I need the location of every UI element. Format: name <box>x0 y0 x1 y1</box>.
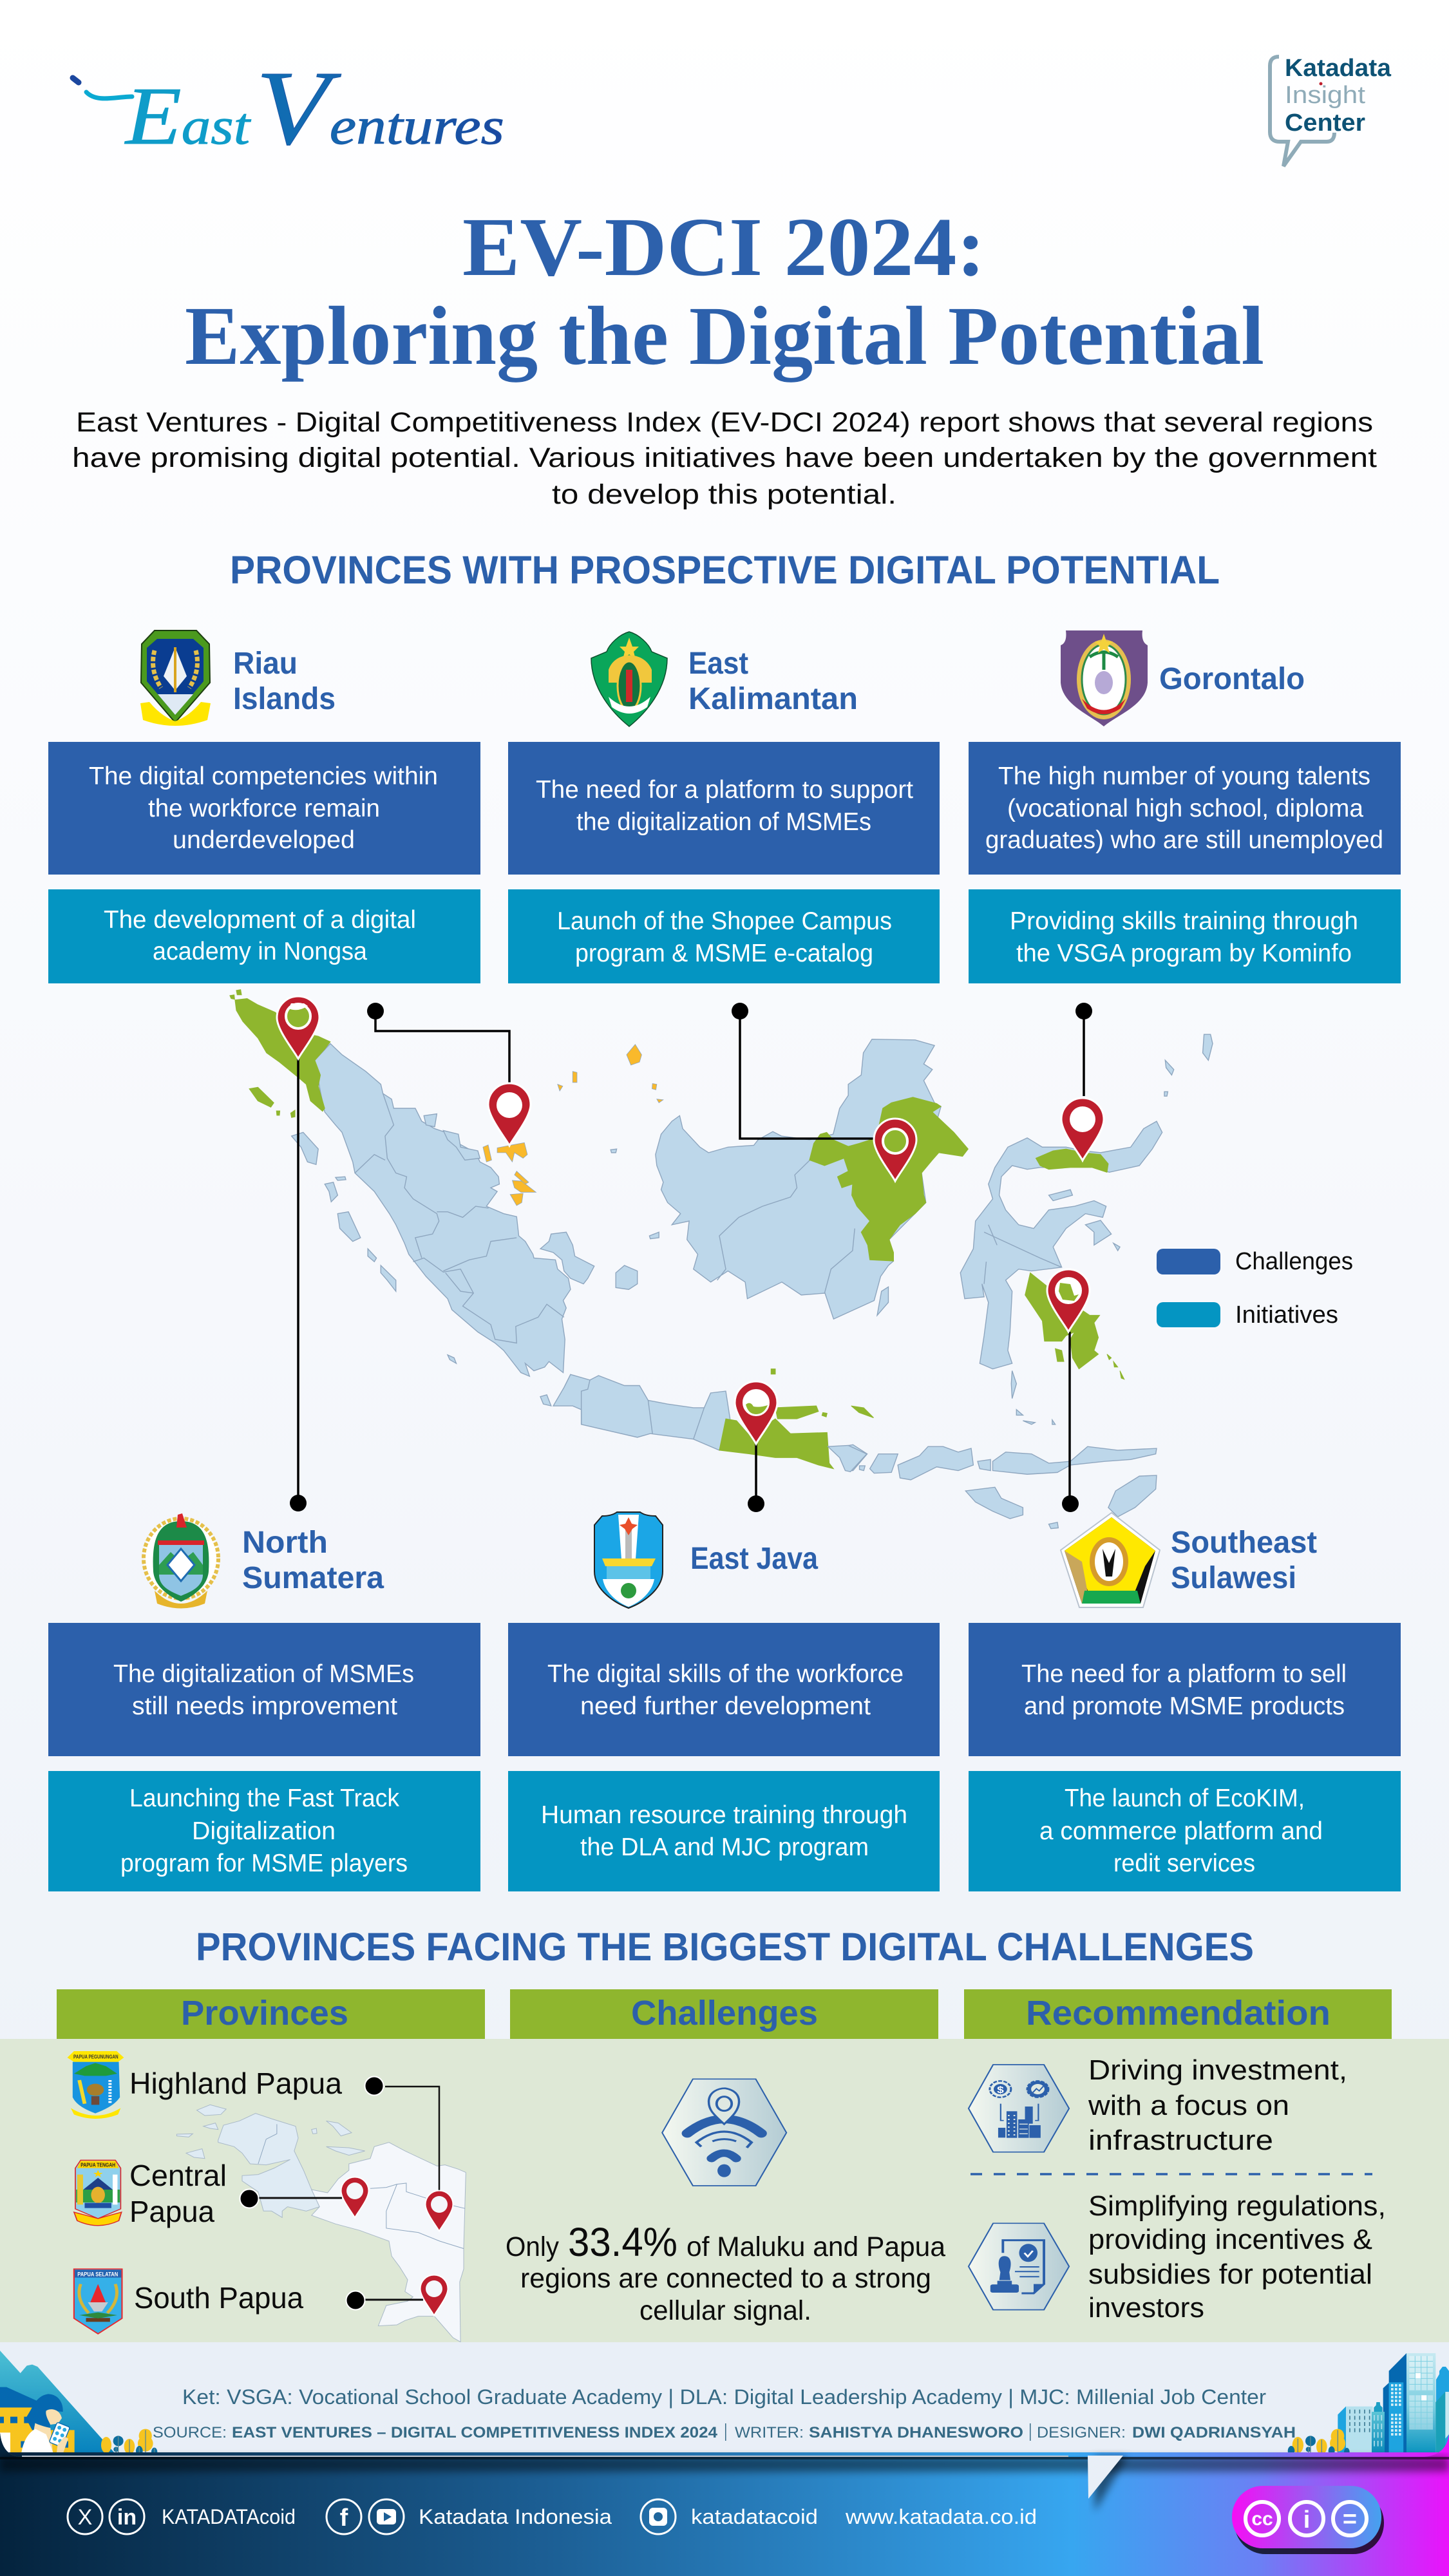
initiative card: East Kalimantan <box>508 889 940 983</box>
logo: East Ventures: East <box>124 70 251 162</box>
label <box>233 647 336 716</box>
province: East Kalimantan <box>591 632 858 726</box>
challenge card: Gorontalo: graduates) who are still unemployed <box>985 826 1383 854</box>
icon: regulation document and stamp <box>969 2223 1069 2310</box>
challenge card: Gorontalo <box>969 742 1401 875</box>
logo: Katadata Insight Center: Insight <box>1285 82 1365 109</box>
connector: Southeast Sulawesi <box>1062 1332 1079 1512</box>
province: Riau Islands <box>140 630 336 726</box>
initiative card: Southeast Sulawesi <box>969 1771 1401 1891</box>
text: signal statistic: cellular signal. <box>639 2295 811 2326</box>
label: Highland Papua: Highland Papua <box>129 2067 342 2100</box>
connector: Riau Islands <box>367 1003 509 1083</box>
challenge card: Gorontalo: The high number of young talents <box>998 762 1370 790</box>
challenge card: East Java <box>508 1623 940 1756</box>
province: North Sumatera <box>144 1513 384 1609</box>
creative commons badge: = <box>1343 2506 1357 2533</box>
creative commons badge: cc <box>1251 2508 1273 2530</box>
emblem: Central Papua: PAPUA TENGAH <box>80 2163 115 2168</box>
column header: Recommendation <box>964 1989 1392 2039</box>
pin: Riau Islands <box>488 1083 531 1146</box>
initiative card: East Java: the DLA and MJC program <box>580 1833 869 1861</box>
website: www.katadata.co.id <box>845 2505 1037 2528</box>
source line: EAST VENTURES – DIGITAL COMPETITIVENESS INDEX 2024 <box>232 2424 718 2441</box>
map: Papua <box>176 2105 466 2342</box>
challenge card: Riau Islands <box>48 742 480 875</box>
column header: Provinces: Provinces <box>181 1994 348 2032</box>
challenge card: East Kalimantan: the digitalization of MSMEs <box>576 808 871 836</box>
initiative card: North Sumatera: Launching the Fast Track <box>129 1785 399 1812</box>
logo: Katadata Insight Center <box>1270 55 1392 166</box>
legend: Initiatives <box>1235 1302 1338 1329</box>
label: Islands <box>233 682 336 716</box>
challenge card: East Kalimantan: The need for a platform to support <box>536 776 913 804</box>
connector: Central Papua <box>240 2190 342 2208</box>
logo: Katadata Insight Center: Center <box>1285 109 1365 137</box>
text: signal statistic: Only <box>506 2231 559 2262</box>
column header: Challenges <box>510 1989 938 2039</box>
emblem: Riau Islands <box>140 630 211 726</box>
note: abbreviations: Ket: VSGA: Vocational School Graduate Academy | DLA: Digital Leadership Academy | MJC: Millenial Job Center <box>182 2385 1266 2409</box>
social: X and LinkedIn <box>68 2499 296 2534</box>
map: Indonesia <box>230 990 1213 1529</box>
label: East Java <box>690 1542 818 1576</box>
emblem: North Sumatera <box>144 1513 218 1609</box>
initiative card: Southeast Sulawesi: The launch of EcoKIM, <box>1065 1785 1305 1812</box>
connector: Highland Papua <box>365 2076 439 2191</box>
label: East <box>688 647 748 681</box>
connector: North Sumatera <box>290 1056 307 1511</box>
initiative card: North Sumatera: Digitalization <box>192 1817 336 1845</box>
label <box>1171 1526 1317 1595</box>
intro paragraph <box>72 407 1377 510</box>
pin: Central Papua <box>341 2177 368 2218</box>
text: recommendation one: Driving investment, <box>1088 2054 1347 2086</box>
social: X and LinkedIn: in <box>117 2505 137 2530</box>
initiative card: Gorontalo <box>969 889 1401 983</box>
icon: wifi signal <box>662 2079 786 2186</box>
initiative card: Southeast Sulawesi: redit services <box>1113 1850 1255 1877</box>
panel: digital challenges band <box>0 2039 1449 2342</box>
intro paragraph: to develop this potential. <box>552 479 896 510</box>
pin: Southeast Sulawesi <box>1047 1269 1090 1332</box>
text: recommendation two: providing incentives & <box>1088 2224 1372 2255</box>
challenge card: North Sumatera: The digitalization of MSMEs <box>113 1660 414 1688</box>
label: Sulawesi <box>1171 1561 1296 1595</box>
title <box>185 201 1264 383</box>
creative commons badge <box>1232 2486 1384 2554</box>
initiative card: East Java <box>508 1771 940 1891</box>
challenge card: Riau Islands: the workforce remain <box>148 795 380 822</box>
column header: Provinces <box>57 1989 485 2039</box>
icon: investment and infrastructure <box>969 2065 1069 2152</box>
initiative card: East Kalimantan: program & MSME e-catalog <box>575 940 873 967</box>
initiative card: East Java: Human resource training through <box>541 1801 907 1829</box>
challenge card: East Java: The digital skills of the workforce <box>547 1660 904 1688</box>
text: recommendation two: Simplifying regulations, <box>1088 2190 1386 2222</box>
social: X and LinkedIn: X <box>78 2505 92 2530</box>
illustration: city buildings <box>1338 2353 1449 2457</box>
social: Instagram <box>641 2499 818 2534</box>
pin: South Papua <box>421 2275 448 2316</box>
footer bar <box>0 2433 1449 2576</box>
source line: DWI QADRIANSYAH <box>1132 2424 1296 2441</box>
text: signal statistic: 33.4% <box>568 2220 677 2265</box>
pin: North Sumatera <box>277 996 319 1059</box>
challenge card: Riau Islands: underdeveloped <box>173 826 355 854</box>
emblem: South Papua <box>74 2269 122 2334</box>
heading: provinces with prospective digital potential: PROVINCES WITH PROSPECTIVE DIGITAL POTENTIAL <box>230 548 1220 592</box>
pin: Highland Papua <box>426 2191 453 2231</box>
logo: Katadata Insight Center: Katadata <box>1285 55 1392 82</box>
legend: Challenges <box>1235 1248 1353 1275</box>
social: Facebook and YouTube <box>327 2499 612 2534</box>
heading: provinces facing the biggest digital challenges: PROVINCES FACING THE BIGGEST DIGITAL CHALLENGES <box>196 1925 1254 1969</box>
initiative card: Riau Islands <box>48 889 480 983</box>
pin: Gorontalo <box>1061 1098 1104 1160</box>
initiative card: North Sumatera: program for MSME players <box>120 1850 408 1877</box>
emblem: Highland Papua <box>68 2051 124 2119</box>
initiative card: North Sumatera <box>48 1771 480 1891</box>
title: Exploring the Digital Potential <box>185 290 1264 383</box>
text: recommendation two <box>1088 2190 1386 2324</box>
initiative card: Riau Islands: academy in Nongsa <box>153 938 367 965</box>
intro paragraph: have promising digital potential. Various initiatives have been undertaken by the government <box>72 442 1377 473</box>
connector: South Papua <box>346 2291 423 2309</box>
challenge card: Southeast Sulawesi <box>969 1623 1401 1756</box>
challenge card: Southeast Sulawesi: and promote MSME products <box>1024 1692 1345 1720</box>
intro paragraph: East Ventures - Digital Competitiveness Index (EV-DCI 2024) report shows that several regions <box>76 407 1373 438</box>
connector: Gorontalo <box>1075 1003 1092 1096</box>
label: Central Papua <box>129 2159 227 2228</box>
label: Central Papua: Papua <box>129 2195 214 2228</box>
label: South Papua: South Papua <box>134 2281 303 2315</box>
challenge card: Southeast Sulawesi: The need for a platform to sell <box>1021 1660 1347 1688</box>
source line: WRITER: <box>735 2424 804 2441</box>
text: recommendation one <box>1088 2054 1347 2156</box>
source line: SOURCE: <box>153 2424 227 2441</box>
text: recommendation two: investors <box>1088 2292 1204 2324</box>
challenge card: East Kalimantan <box>508 742 940 875</box>
label: Sumatera <box>242 1561 384 1595</box>
province: Gorontalo <box>1061 630 1305 726</box>
text: recommendation one: with a focus on <box>1088 2090 1289 2121</box>
logo: East Ventures: Ventures <box>256 49 504 167</box>
trees: right <box>1288 2429 1350 2457</box>
social: X and LinkedIn: KATADATAcoid <box>162 2505 296 2528</box>
label: Southeast <box>1171 1526 1317 1560</box>
emblem: East Kalimantan <box>591 632 667 726</box>
logo: East Ventures <box>73 49 504 167</box>
social: Instagram: katadatacoid <box>691 2505 818 2528</box>
map: Sumatra and western islands <box>230 990 775 1376</box>
creative commons badge: i <box>1303 2506 1310 2533</box>
challenge card: North Sumatera <box>48 1623 480 1756</box>
initiative card: Gorontalo: Providing skills training through <box>1010 907 1358 935</box>
initiative card: Riau Islands: The development of a digital <box>104 906 416 934</box>
text: signal statistic: regions are connected to a strong <box>520 2263 931 2294</box>
pin: East Kalimantan <box>874 1119 916 1181</box>
column header: Recommendation: Recommendation <box>1026 1994 1331 2032</box>
source line <box>153 2423 1296 2441</box>
label: North <box>242 1526 328 1560</box>
emblem: Southeast Sulawesi <box>1061 1513 1160 1607</box>
divider: recommendations <box>971 2173 1372 2175</box>
label <box>242 1526 384 1595</box>
emblem: East Java <box>594 1512 663 1608</box>
legend <box>1157 1248 1353 1329</box>
footer note band <box>0 2342 1449 2457</box>
label: Gorontalo <box>1159 662 1305 696</box>
initiative card: Gorontalo: the VSGA program by Kominfo <box>1016 940 1352 967</box>
map: Java and Madura <box>540 1374 874 1471</box>
label: Riau <box>233 647 298 681</box>
connector: East Java <box>748 1443 764 1512</box>
label: Kalimantan <box>688 682 858 716</box>
text: signal statistic: of Maluku and Papua <box>687 2231 945 2262</box>
emblem: South Papua: PAPUA SELATAN <box>77 2271 118 2278</box>
initiative card: Southeast Sulawesi: a commerce platform and <box>1039 1817 1323 1845</box>
title: EV-DCI 2024: <box>462 201 985 294</box>
social: Facebook and YouTube: Katadata Indonesia <box>419 2505 612 2528</box>
social: Facebook and YouTube: f <box>340 2505 348 2532</box>
map: Kalimantan, Sulawesi and eastern islands <box>656 1034 1213 1529</box>
initiative card: East Kalimantan: Launch of the Shopee Campus <box>557 907 892 935</box>
text: recommendation two: subsidies for potential <box>1088 2259 1372 2290</box>
province: Southeast Sulawesi <box>1061 1513 1317 1607</box>
challenge card: Gorontalo: (vocational high school, diploma <box>1007 795 1363 822</box>
trees: left <box>101 2429 157 2457</box>
icon: investment and infrastructure: $ <box>997 2085 1004 2095</box>
illustration: woman with phone <box>0 2351 118 2457</box>
source line: DESIGNER: <box>1037 2424 1126 2441</box>
emblem: Gorontalo <box>1061 630 1148 726</box>
connector: East Kalimantan <box>732 1003 876 1139</box>
text: recommendation one: infrastructure <box>1088 2125 1273 2156</box>
column header: Challenges: Challenges <box>631 1994 818 2032</box>
source line: SAHISTYA DHANESWORO <box>809 2424 1023 2441</box>
label: Central Papua: Central <box>129 2159 227 2192</box>
emblem: Central Papua <box>74 2160 122 2226</box>
label <box>688 647 858 716</box>
emblem: Highland Papua: PAPUA PEGUNUNGAN <box>73 2054 118 2060</box>
challenge card: North Sumatera: still needs improvement <box>132 1692 397 1720</box>
text: signal statistic <box>506 2220 945 2326</box>
pin: East Java <box>735 1381 777 1444</box>
challenge card: Riau Islands: The digital competencies within <box>89 762 438 790</box>
challenge card: East Java: need further development <box>580 1692 871 1720</box>
province: East Java <box>594 1512 818 1608</box>
